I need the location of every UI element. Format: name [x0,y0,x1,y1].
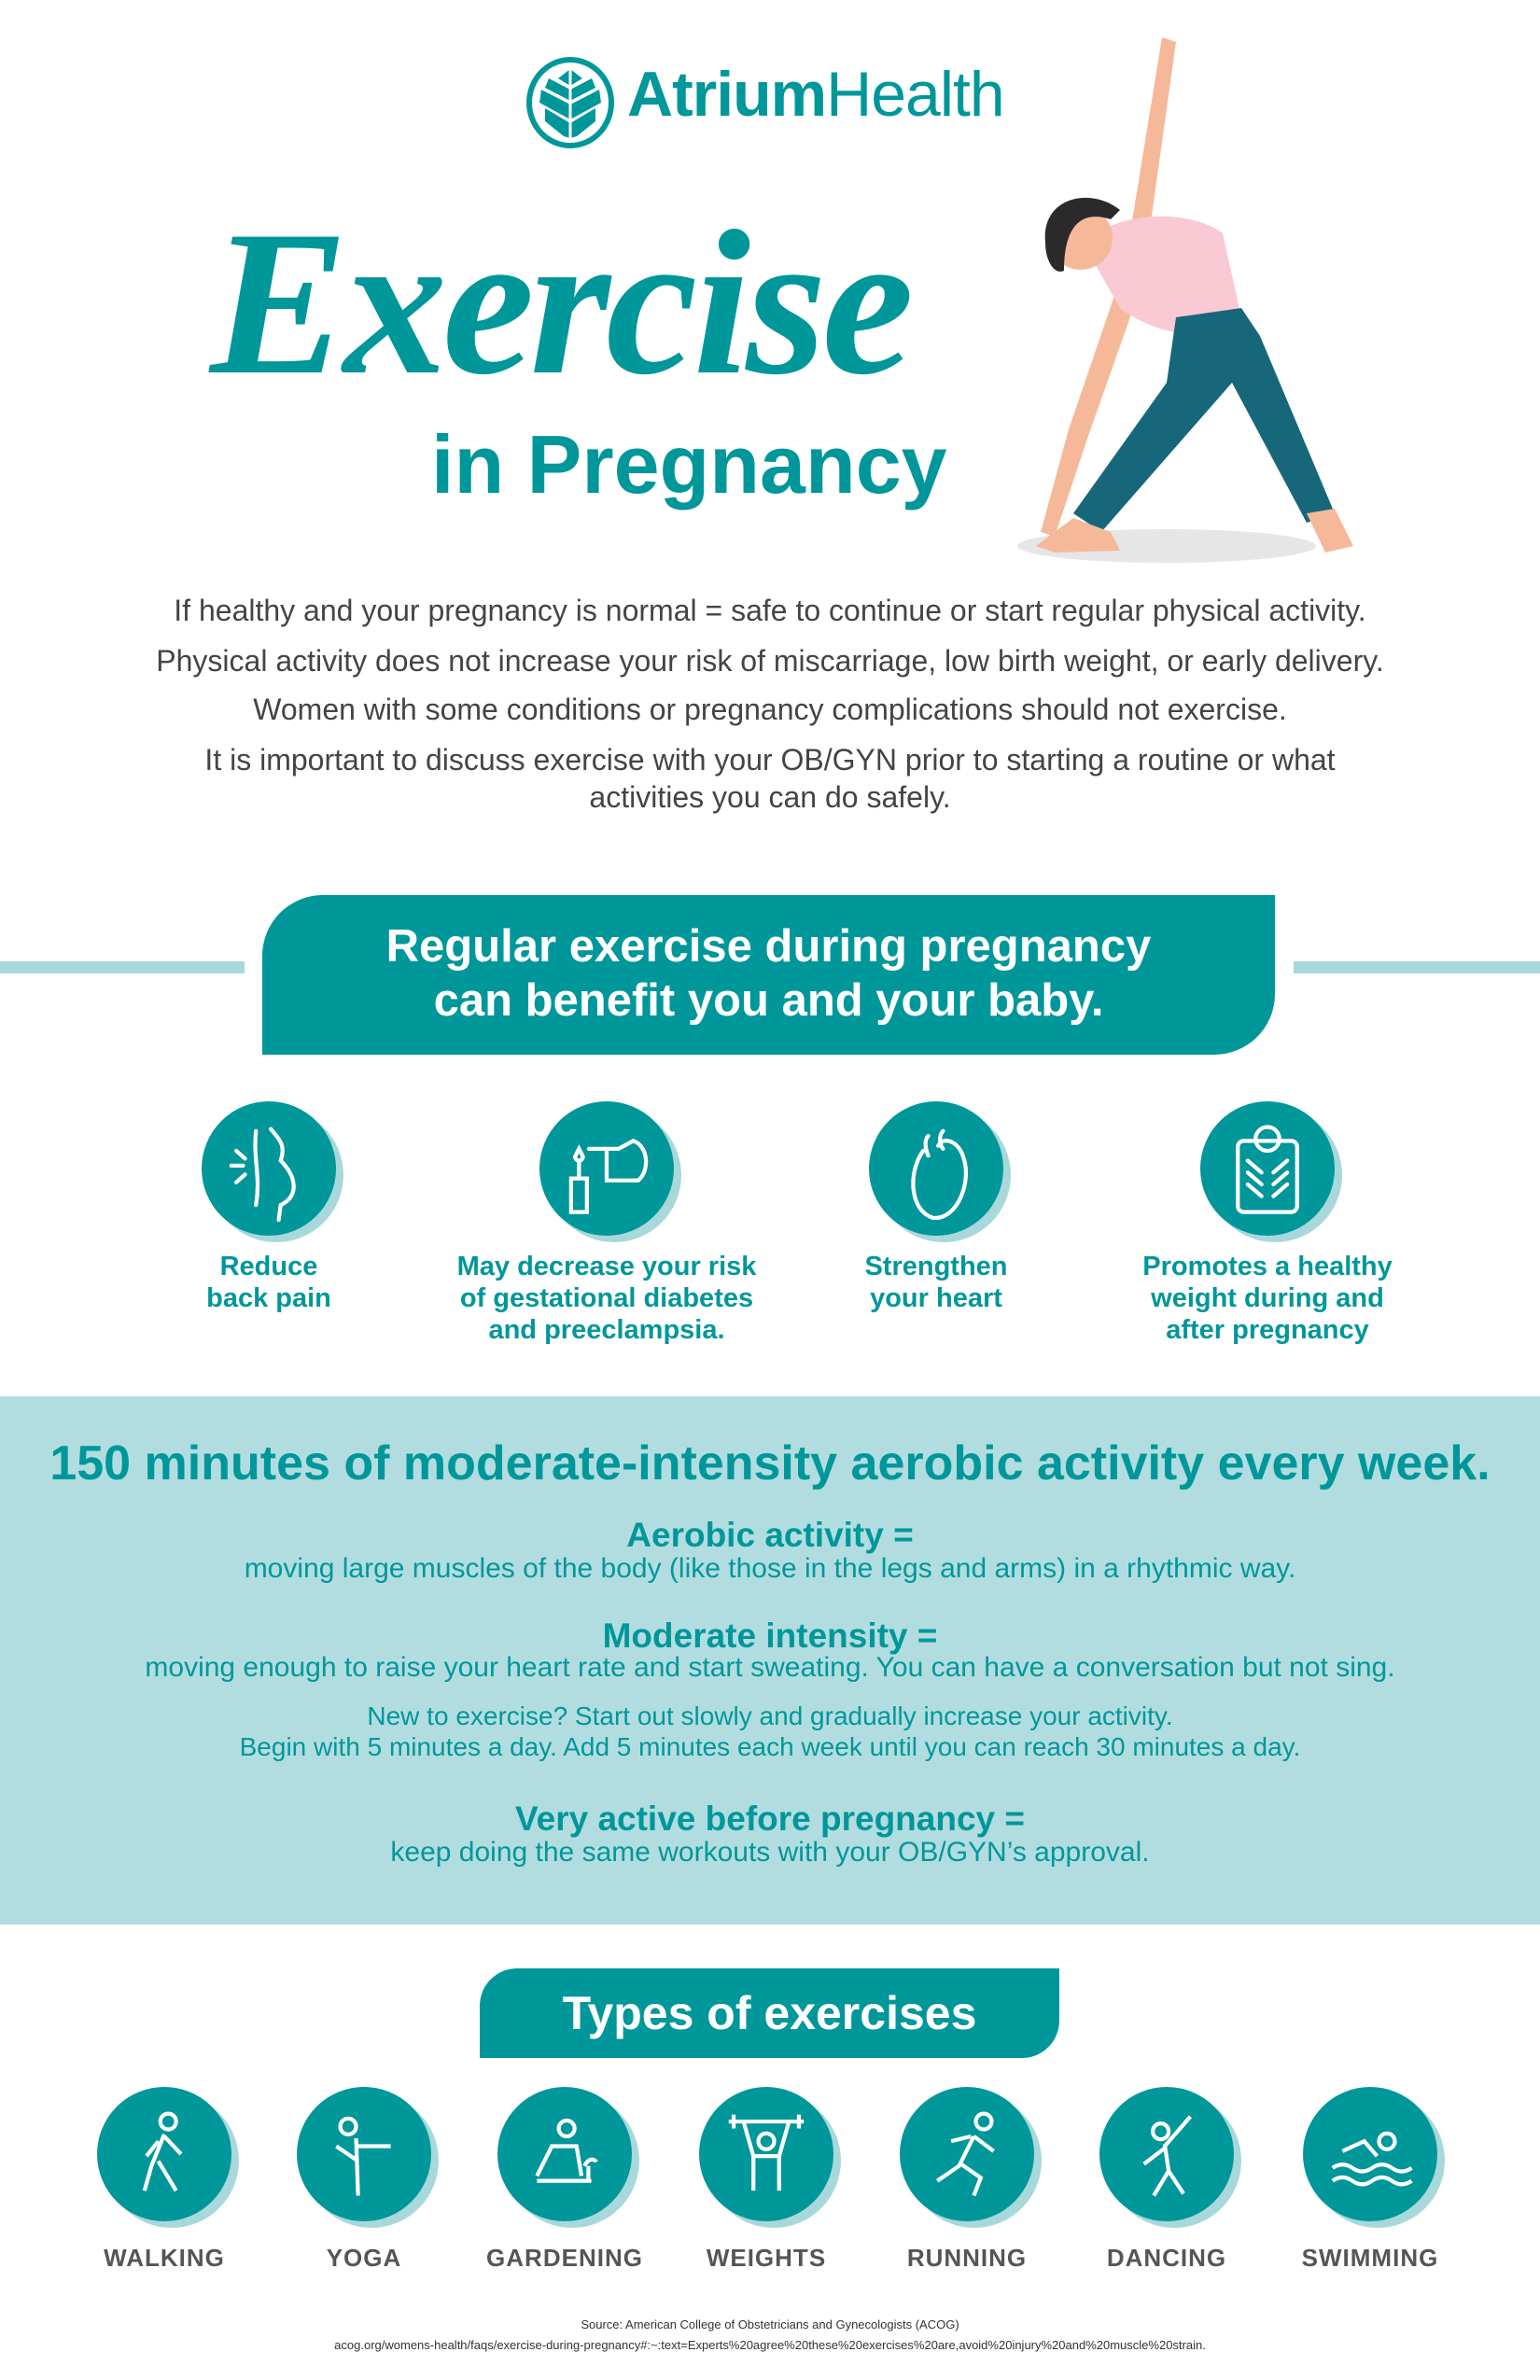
intro text [156,594,1384,814]
panel: aerobic activity guidance: 150 minutes of moderate-intensity aerobic activity every week. [49,1436,1491,1491]
icon: swimming [1302,2087,1445,2272]
icon: glucose test [539,1101,674,1236]
benefit: diabetes [457,1101,756,1345]
logo [526,57,1004,148]
source: Source: American College of Obstetricians and Gynecologists (ACOG) [581,2317,959,2331]
benefit: back pain: back pain [206,1283,331,1313]
title: Exercise: Exercise [210,189,909,418]
icon: gardening [486,2087,643,2272]
banner: types of exercises [480,1968,1059,2058]
benefit: weight: weight during and [1151,1283,1384,1313]
panel: aerobic activity guidance: keep doing the same workouts with your OB/GYN’s approval. [390,1837,1150,1868]
icon: gardening: GARDENING [486,2244,643,2272]
icon: running [900,2087,1042,2272]
benefit: heart: Strengthen [864,1252,1008,1281]
benefit: weight: after pregnancy [1166,1315,1369,1345]
banner: benefits heading: Regular exercise during pregnancy [386,921,1151,972]
banner: benefits heading [262,895,1275,1055]
logo: AtriumHealth [627,59,1004,130]
text: If healthy and your pregnancy is normal = safe to continue or start regular physical activity. [174,594,1366,627]
icon: heart [869,1101,1003,1236]
icon: yoga: YOGA [327,2244,401,2272]
icon: scale [1200,1101,1335,1236]
text: Physical activity does not increase your risk of miscarriage, low birth weight, or early delivery. [156,644,1384,678]
benefit: back pain [202,1101,343,1313]
benefit: diabetes: and preeclampsia. [488,1315,725,1345]
panel: aerobic activity guidance: moving enough to raise your heart rate and start sweating. You can have a conversation but not sing. [145,1652,1395,1683]
icon: weights [699,2087,841,2272]
icon: walking: WALKING [104,2244,225,2272]
icon: running: RUNNING [907,2244,1027,2272]
icon: logo leaf [526,57,614,148]
panel: aerobic activity guidance: Very active before pregnancy = [515,1799,1025,1838]
benefit: weight: Promotes a healthy [1142,1252,1393,1281]
subtitle: in Pregnancy: in Pregnancy [431,418,947,511]
benefit: back pain: Reduce [220,1252,317,1281]
icon: swimming: SWIMMING [1302,2244,1438,2272]
benefit: diabetes: of gestational diabetes [460,1283,753,1313]
benefit: heart [864,1101,1011,1313]
text: It is important to discuss exercise with your OB/GYN prior to starting a routine or what [204,743,1336,777]
icon: yoga [297,2087,439,2272]
text: activities you can do safely. [589,780,951,814]
panel: aerobic activity guidance: moving large muscles of the body (like those in the legs and arms) in a rhythmic way. [245,1553,1295,1584]
illustration: woman in triangle pose [1017,37,1353,563]
icon: back [202,1101,336,1236]
source: acog.org/womens-health/faqs/exercise-during-pregnancy#:~:text=Experts%20agree%20these%20exercises%20are,avoid%20injury%20and%20muscle%20strain. [334,2338,1206,2352]
icon: weights: WEIGHTS [707,2244,826,2272]
banner: benefits heading: can benefit you and your baby. [434,975,1103,1026]
panel: aerobic activity guidance: New to exercise? Start out slowly and gradually increase your activity. [367,1701,1173,1730]
source [334,2317,1206,2352]
benefit: diabetes: May decrease your risk [457,1252,756,1281]
panel: aerobic activity guidance [0,1396,1540,1925]
panel: aerobic activity guidance: Moderate intensity = [603,1617,937,1655]
benefit: weight [1142,1101,1393,1345]
panel: aerobic activity guidance: Begin with 5 minutes a day. Add 5 minutes each week until you can reach 30 minutes a day. [240,1732,1300,1761]
icon: dancing: DANCING [1107,2244,1226,2272]
icon: dancing [1099,2087,1241,2272]
panel: aerobic activity guidance: Aerobic activity = [626,1516,914,1554]
exercise icons row [97,2087,1445,2272]
benefit: heart: your heart [870,1283,1002,1313]
banner: types of exercises: Types of exercises [563,1987,976,2039]
icon: walking [97,2087,239,2272]
text: Women with some conditions or pregnancy complications should not exercise. [253,693,1287,726]
